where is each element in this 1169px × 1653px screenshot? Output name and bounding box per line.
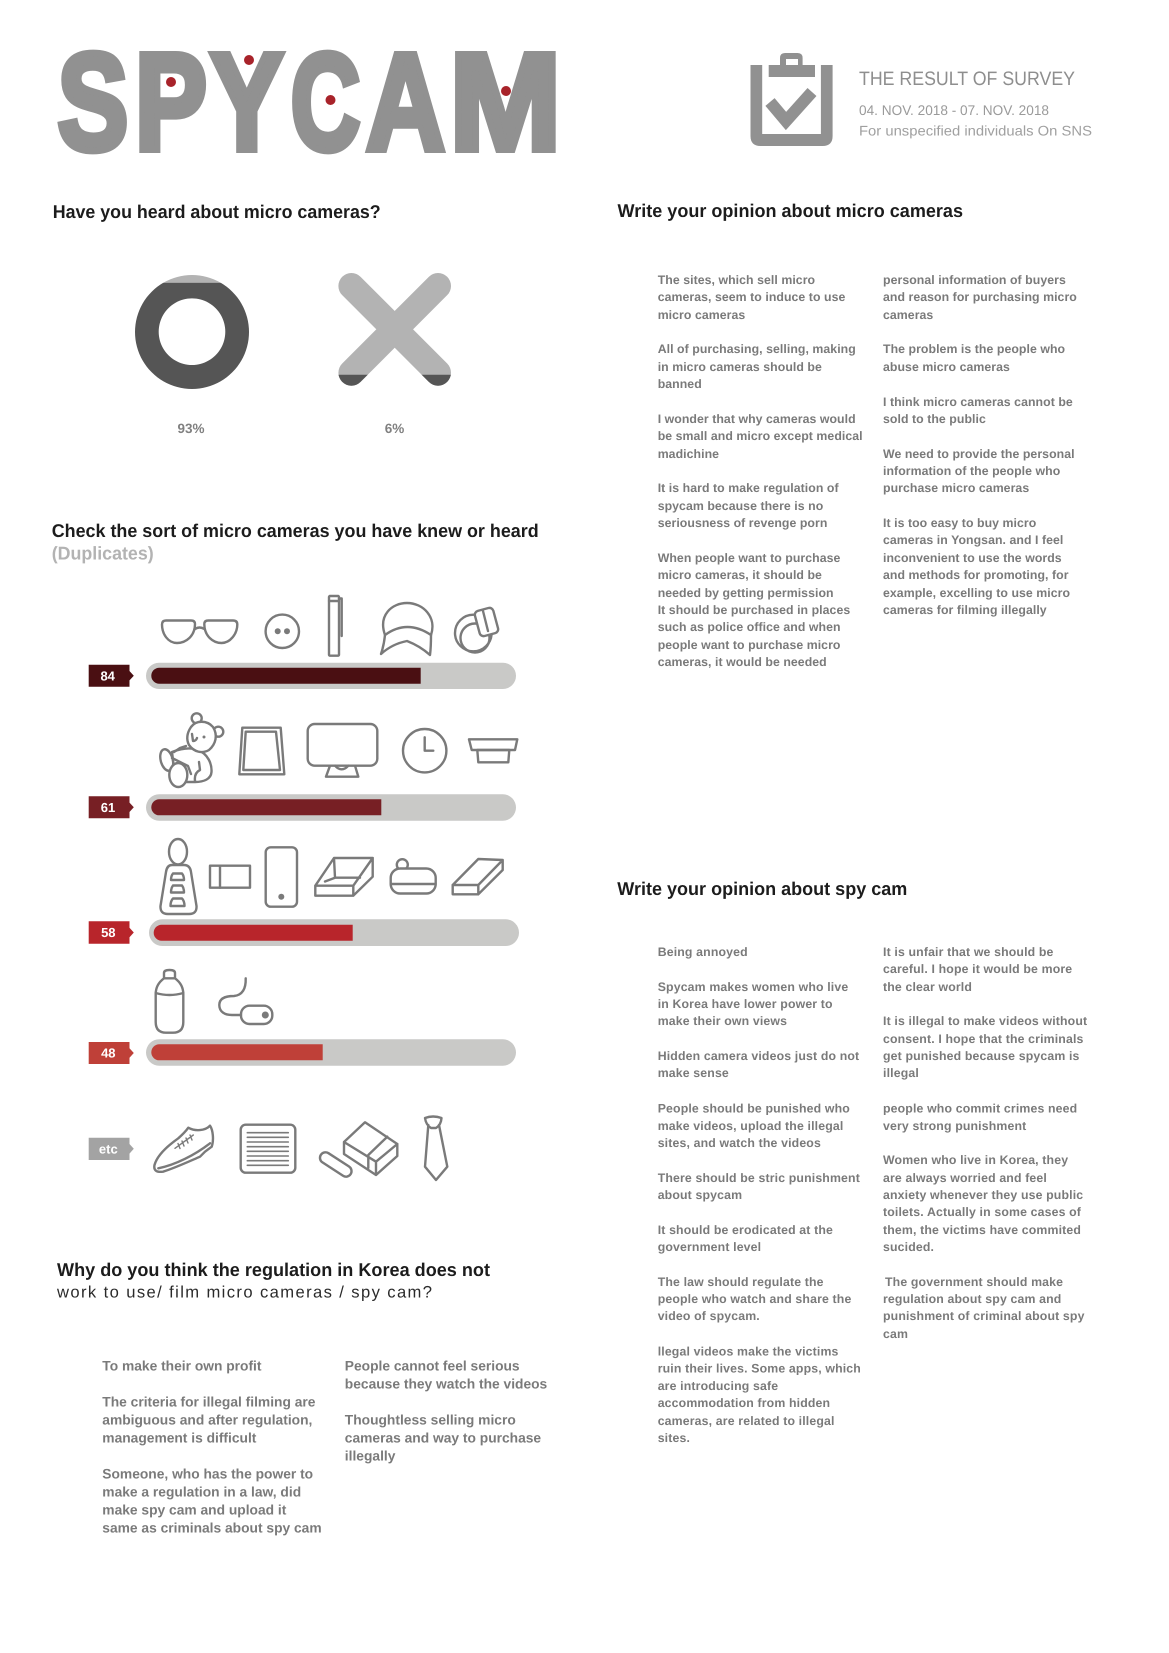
text block: micro camera opinions left column: It should be purchased in places: [658, 603, 850, 617]
text block: spy cam opinions right column: It is illegal to make videos without: [883, 1014, 1087, 1028]
icon: flat box: [453, 859, 503, 894]
text block: micro camera opinions left column: The sites, which sell micro: [658, 273, 816, 287]
label: 93%: 93%: [177, 421, 205, 436]
icon: tie: [425, 1116, 447, 1180]
text block: micro camera opinions right column: sold to the public: [883, 412, 986, 426]
text block: regulation reasons right column: [345, 1358, 548, 1463]
text block: micro camera opinions right column: personal information of buyers: [883, 273, 1066, 287]
text block: micro camera opinions left column: [658, 273, 863, 669]
text block: spy cam opinions left column: about spycam: [658, 1188, 742, 1202]
bar: 48: [89, 1039, 516, 1066]
text block: spy cam opinions left column: people who watch and share the: [658, 1292, 851, 1306]
text block: spy cam opinions left column: make videos, upload the illegal: [658, 1119, 843, 1133]
bar: 61: 61: [101, 800, 115, 815]
text block: micro camera opinions right column: We need to provide the personal: [883, 447, 1075, 461]
text block: micro camera opinions left column: seriousness of revenge porn: [658, 516, 827, 530]
text block: regulation reasons left column: same as criminals about spy cam: [102, 1520, 322, 1535]
text block: spy cam opinions left column: ruin their lives. Some apps, which: [658, 1362, 861, 1376]
text block: spy cam opinions right column: are always worried and feel: [883, 1171, 1047, 1185]
chart: X answer 6%: [351, 286, 438, 373]
text block: regulation reasons right column: because they watch the videos: [345, 1376, 548, 1391]
text block: regulation reasons left column: To make their own profit: [102, 1358, 262, 1373]
text block: spy cam opinions left column: Being annoyed: [658, 945, 748, 959]
heading: why regulation does not work: [56, 1259, 490, 1301]
text block: spy cam opinions right column: regulation about spy cam and: [883, 1292, 1061, 1306]
text block: spy cam opinions left column: llegal videos make the victims: [658, 1344, 839, 1358]
survey information text: 04. NOV. 2018 - 07. NOV. 2018: [859, 102, 1049, 118]
text block: micro camera opinions right column: example, excelling to use micro: [883, 586, 1070, 600]
text block: spy cam opinions right column: toilets. Actually in some cases of: [883, 1205, 1082, 1219]
tag: etc: etc: [99, 1141, 118, 1156]
icon: mouse: [219, 978, 272, 1024]
icon row: shoe, notebook, box and roll, tie: [154, 1116, 447, 1180]
icon: eraser box and roll: [318, 1122, 397, 1179]
text block: regulation reasons left column: make spy cam and upload it: [102, 1502, 287, 1517]
heading: opinion about micro cameras: Write your opinion about micro cameras: [618, 200, 963, 221]
icon: open box: [315, 858, 373, 896]
icon: key fob: [160, 839, 197, 914]
bar: 61: [89, 794, 516, 821]
text block: spy cam opinions left column: There should be stric punishment: [658, 1171, 860, 1185]
survey information text: THE RESULT OF SURVEY: [859, 68, 1075, 90]
text block: spy cam opinions left column: sites.: [658, 1431, 690, 1445]
text block: micro camera opinions left column: It is hard to make regulation of: [658, 481, 839, 495]
text block: spy cam opinions right column: It is unfair that we should be: [883, 945, 1054, 959]
bar: 48: 48: [101, 1046, 116, 1060]
icon: notebook: [241, 1125, 295, 1173]
text block: micro camera opinions left column: banned: [658, 377, 702, 391]
icon: tray: [469, 739, 517, 762]
icon: pen: [329, 596, 342, 656]
text block: spy cam opinions right column: punishment of criminal about spy: [883, 1309, 1085, 1323]
text block: micro camera opinions right column: It is too easy to buy micro: [883, 516, 1037, 530]
icon: monitor: [308, 724, 377, 777]
text block: spy cam opinions right column: very strong punishment: [883, 1119, 1026, 1133]
icon: glasses: [162, 620, 237, 643]
text block: spy cam opinions left column: [658, 945, 861, 1445]
text block: spy cam opinions right column: them, the victims have commited: [883, 1223, 1081, 1237]
text block: spy cam opinions right column: Women who live in Korea, they: [883, 1153, 1068, 1167]
text block: spy cam opinions left column: Spycam makes women who live: [658, 980, 848, 994]
text block: micro camera opinions right column: abuse micro cameras: [883, 360, 1010, 374]
text block: regulation reasons right column: People cannot feel serious: [345, 1358, 520, 1373]
heading: why regulation does not work: Why do you think the regulation in Korea does not: [57, 1259, 490, 1280]
text block: spy cam opinions right column: cam: [883, 1327, 908, 1341]
heading: sort of micro cameras: (Duplicates): [52, 542, 154, 563]
icon: clipboard with check mark: [750, 53, 833, 146]
icon: picture frame: [239, 728, 284, 774]
text block: spy cam opinions left column: accommodation from hidden: [658, 1396, 830, 1410]
icon: clock: [403, 729, 446, 772]
text block: micro camera opinions right column: I think micro cameras cannot be: [883, 395, 1073, 409]
icon row: glasses, button, pen, cap, ring: [162, 596, 499, 656]
text block: micro camera opinions right column: information of the people who: [883, 464, 1061, 478]
icon: soap case: [391, 859, 436, 894]
text block: micro camera opinions left column: micro cameras, it should be: [658, 568, 822, 582]
heading: have you heard: Have you heard about micro cameras?: [53, 201, 381, 222]
text block: regulation reasons left column: make a regulation in a law, did: [102, 1484, 301, 1499]
text block: micro camera opinions right column: and reason for purchasing micro: [883, 290, 1077, 304]
text block: spy cam opinions right column: the clear world: [883, 980, 972, 994]
icon: shoe: [154, 1126, 213, 1172]
text block: spy cam opinions left column: Hidden camera videos just do not: [658, 1049, 859, 1063]
survey information text: [859, 68, 1092, 139]
icon: cap: [381, 603, 432, 655]
text block: micro camera opinions left column: cameras, it would be needed: [658, 655, 827, 669]
icon: small rectangle: [210, 866, 250, 888]
icon row: key fob, box, phone, open box, soap, flat box: [160, 839, 503, 914]
text block: spy cam opinions right column: anxiety whenever they use public: [883, 1188, 1083, 1202]
bar: 84: [89, 663, 516, 689]
text block: spy cam opinions left column: The law should regulate the: [658, 1275, 824, 1289]
text block: micro camera opinions right column: cameras in Yongsan. and I feel: [883, 533, 1063, 547]
text block: spy cam opinions right column: sucided.: [883, 1240, 934, 1254]
text block: micro camera opinions left column: madichine: [658, 447, 719, 461]
text block: micro camera opinions left column: cameras, seem to induce to use: [658, 290, 845, 304]
text block: spy cam opinions left column: sites, and watch the videos: [658, 1136, 821, 1150]
text block: micro camera opinions right column: cameras for filming illegally: [883, 603, 1047, 617]
chart: O answer ring 93%: [135, 275, 249, 389]
icon: button camera: [266, 615, 299, 648]
text block: regulation reasons left column: Someone, who has the power to: [102, 1466, 313, 1481]
title: SPYCAM: C: [291, 26, 360, 180]
text block: spy cam opinions left column: People should be punished who: [658, 1101, 850, 1115]
bar: 58: [89, 919, 519, 946]
heading: opinion about spy cam: Write your opinion about spy cam: [617, 878, 907, 899]
label: 6%: 6%: [385, 421, 404, 436]
title: SPYCAM: [58, 26, 561, 180]
text block: micro camera opinions left column: be small and micro except medical: [658, 429, 863, 443]
text block: spy cam opinions left column: It should be erodicated at the: [658, 1223, 833, 1237]
text block: regulation reasons left column: ambiguous and after regulation,: [102, 1412, 312, 1427]
bar: 84: 84: [100, 668, 116, 684]
bar: 58: 58: [101, 925, 116, 940]
text block: micro camera opinions left column: needed by getting permission: [658, 586, 834, 600]
tag: etc: [89, 1138, 134, 1160]
text block: spy cam opinions left column: are introducing safe: [658, 1379, 778, 1393]
title: SPYCAM: M: [450, 26, 561, 180]
text block: micro camera opinions right column: and methods for promoting, for: [883, 568, 1069, 582]
text block: spy cam opinions left column: video of spycam.: [658, 1309, 760, 1323]
text block: regulation reasons right column: Thoughtless selling micro: [345, 1412, 516, 1427]
text block: micro camera opinions left column: people want to purchase micro: [658, 638, 841, 652]
text block: spy cam opinions left column: cameras, are related to illegal: [658, 1414, 835, 1428]
text block: regulation reasons left column: The criteria for illegal filming are: [102, 1394, 316, 1409]
text block: spy cam opinions left column: make their own views: [658, 1014, 787, 1028]
text block: regulation reasons left column: [102, 1358, 322, 1535]
icon: ring: [455, 607, 499, 652]
survey information text: For unspecified individuals On SNS: [859, 123, 1092, 139]
text block: micro camera opinions left column: I wonder that why cameras would: [658, 412, 856, 426]
text block: micro camera opinions right column: The problem is the people who: [883, 342, 1066, 356]
heading: sort of micro cameras: Check the sort of micro cameras you have knew or heard: [52, 520, 539, 541]
icon row: teddy bear, frame, monitor, clock, tray: [158, 713, 517, 787]
icon: bottle: [156, 970, 183, 1033]
icon: teddy bear: [158, 713, 223, 787]
text block: micro camera opinions left column: All of purchasing, selling, making: [658, 342, 856, 356]
text block: spy cam opinions right column: people who commit crimes need: [883, 1101, 1077, 1115]
text block: micro camera opinions right column: purchase micro cameras: [883, 481, 1029, 495]
title: SPYCAM: A: [366, 26, 445, 180]
title: SPYCAM: S: [58, 26, 128, 180]
text block: micro camera opinions left column: such as police office and when: [658, 620, 841, 634]
title: SPYCAM: P: [135, 26, 207, 180]
text block: regulation reasons left column: management is difficult: [102, 1430, 257, 1445]
text block: spy cam opinions right column: careful. I hope it would be more: [883, 962, 1072, 976]
text block: micro camera opinions right column: cameras: [883, 308, 933, 322]
text block: spy cam opinions left column: in Korea have lower power to: [658, 997, 833, 1011]
heading: sort of micro cameras: [52, 520, 539, 563]
text block: regulation reasons right column: cameras and way to purchase: [345, 1430, 541, 1445]
text block: spy cam opinions right column: consent. I hope that the criminals: [883, 1032, 1084, 1046]
text block: micro camera opinions left column: in micro cameras should be: [658, 360, 822, 374]
title: SPYCAM: Y: [210, 26, 283, 180]
icon: phone: [266, 847, 297, 907]
text block: spy cam opinions right column: The government should make: [885, 1275, 1063, 1289]
text block: micro camera opinions right column: [883, 273, 1077, 617]
heading: why regulation does not work: work to use/ film micro cameras / spy cam?: [56, 1282, 432, 1301]
text block: spy cam opinions left column: government level: [658, 1240, 761, 1254]
icon row: bottle, mouse: [156, 970, 272, 1033]
text block: micro camera opinions right column: inconvenient to use the words: [883, 551, 1062, 565]
text block: spy cam opinions right column: illegal: [883, 1066, 919, 1080]
text block: micro camera opinions left column: When people want to purchase: [658, 551, 841, 565]
text block: spy cam opinions right column: [883, 945, 1087, 1341]
text block: regulation reasons right column: illegally: [345, 1448, 396, 1463]
text block: micro camera opinions left column: micro cameras: [658, 308, 745, 322]
text block: spy cam opinions left column: make sense: [658, 1066, 729, 1080]
text block: micro camera opinions left column: spycam because there is no: [658, 499, 824, 513]
text block: spy cam opinions right column: get punished because spycam is: [883, 1049, 1080, 1063]
